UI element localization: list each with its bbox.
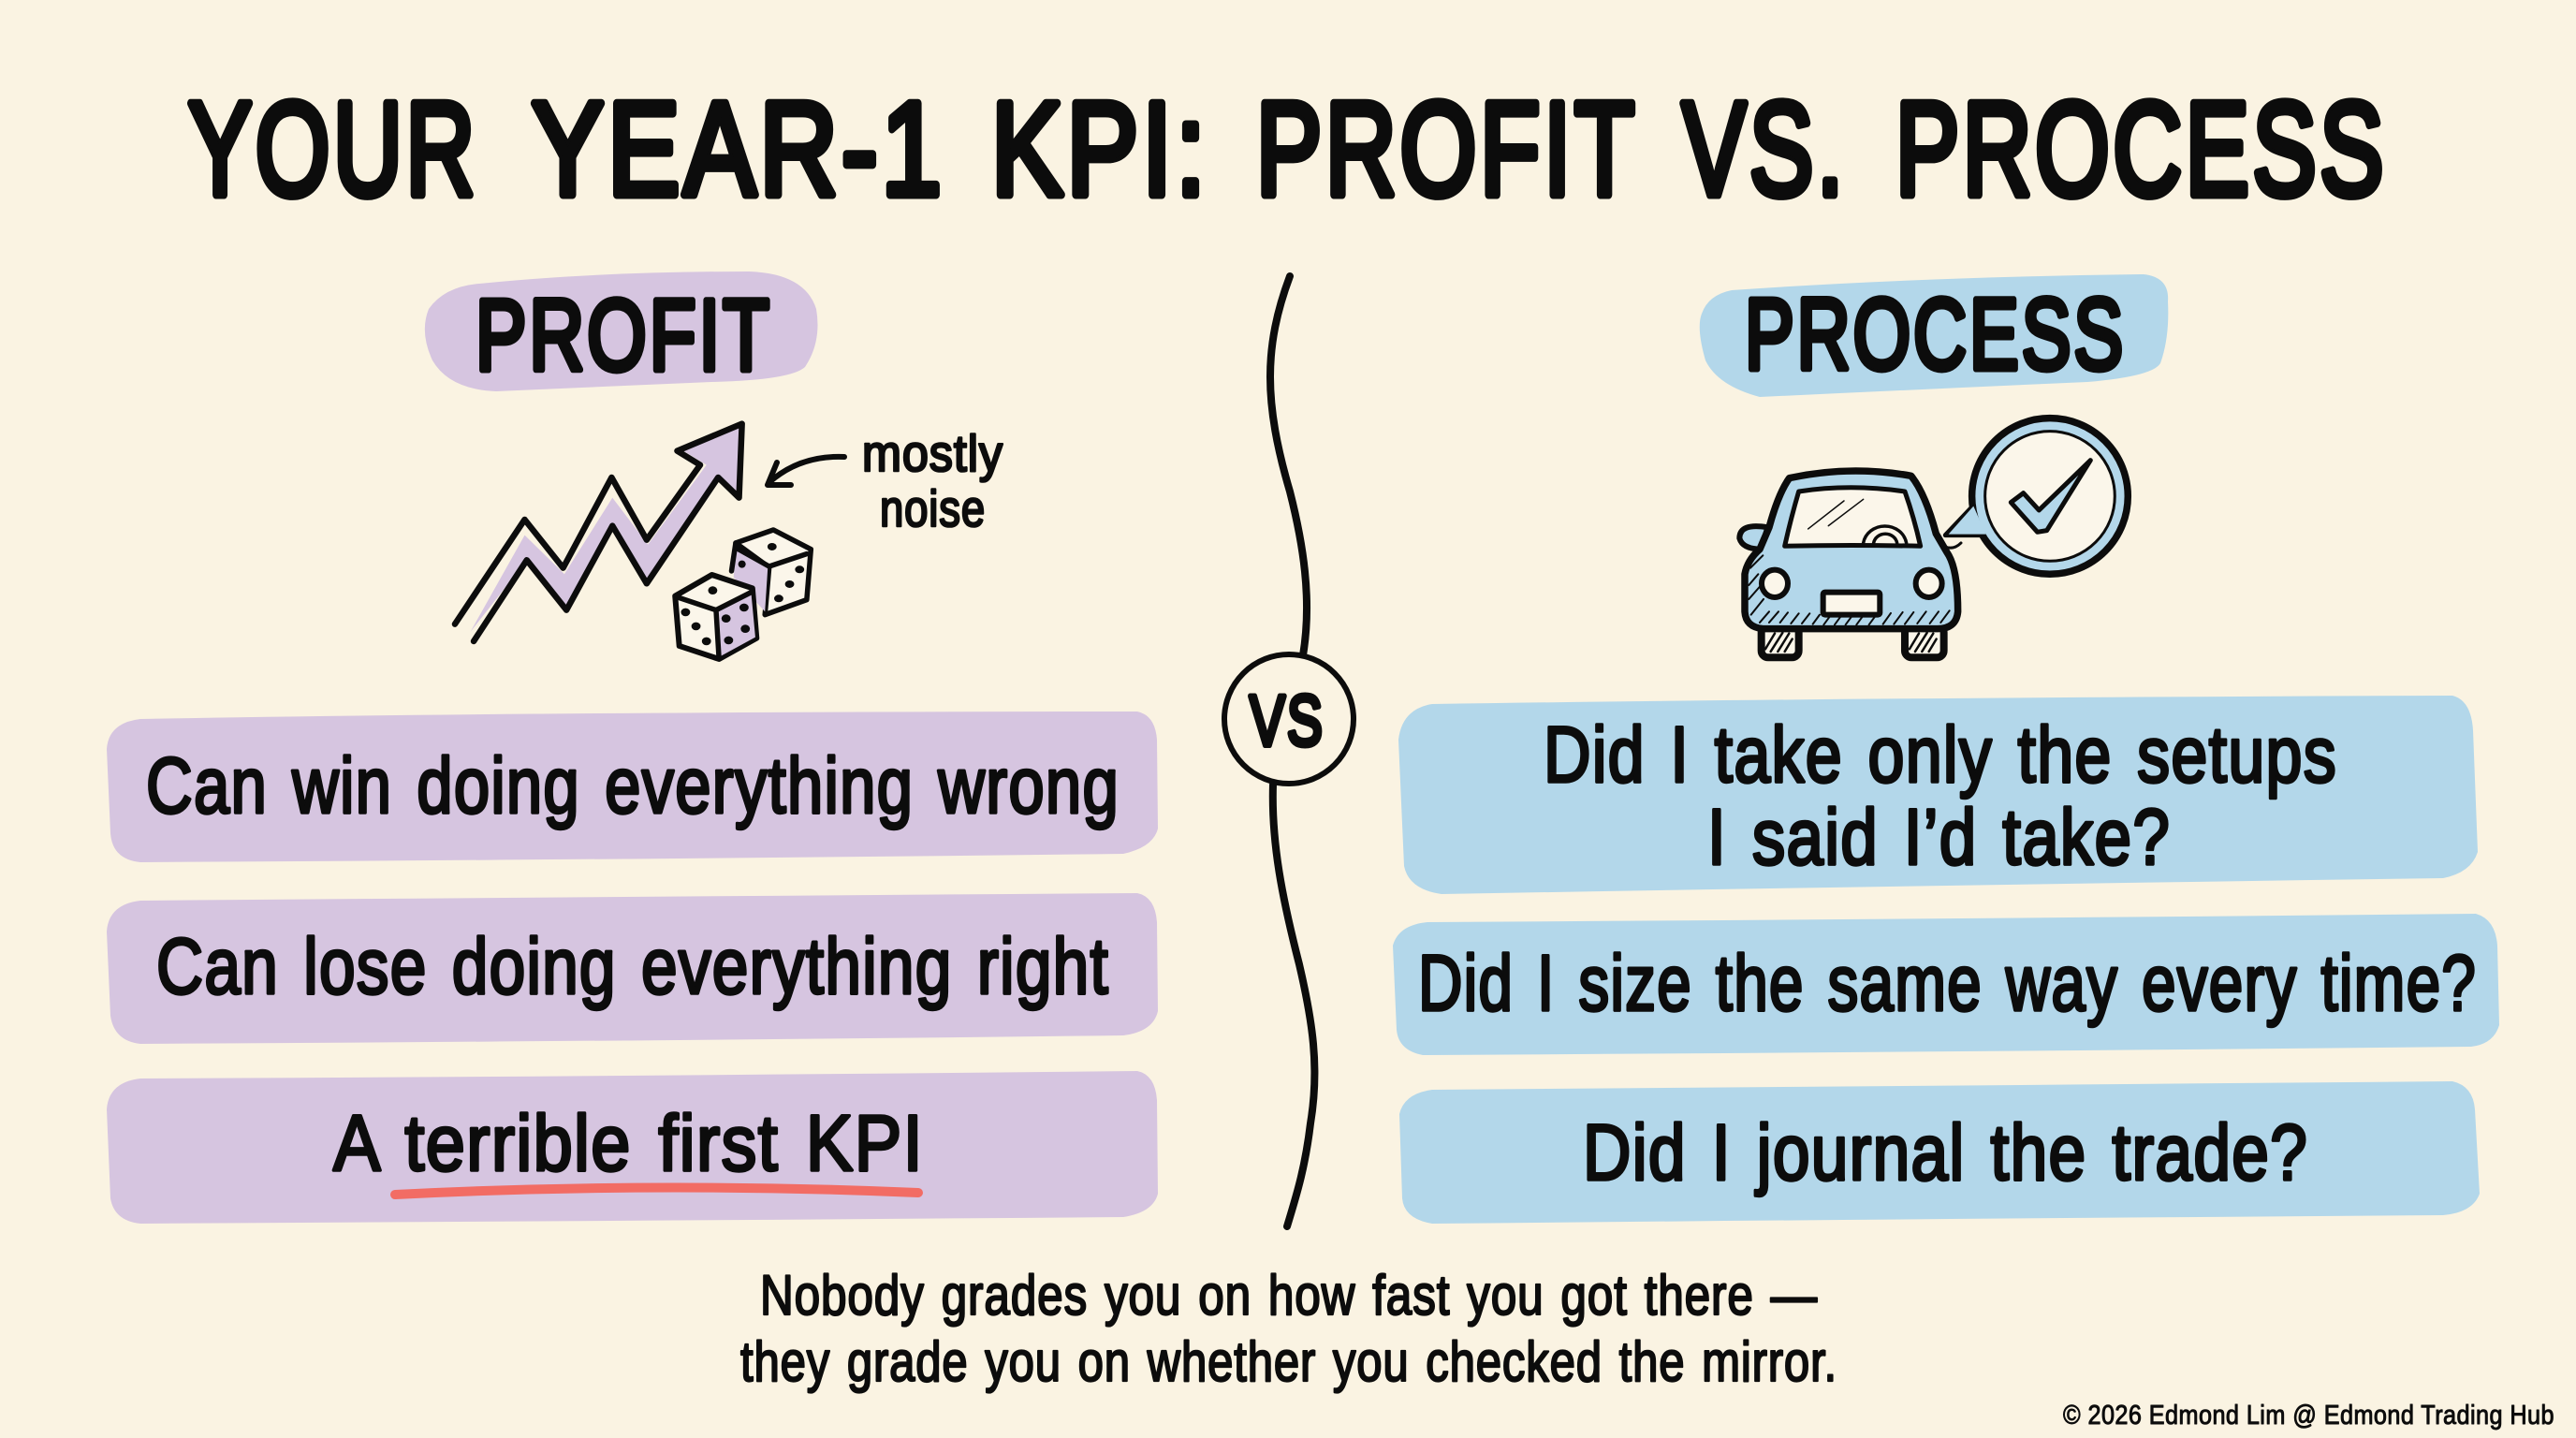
card: did I size the same way every time [1393, 914, 2499, 1055]
title [188, 75, 2387, 224]
badge: VS: VS [1250, 682, 1325, 761]
arrow: pointer to chart [768, 457, 844, 485]
annotation: mostly noise [862, 424, 1003, 537]
card: did I take only the setups: I said I’d take? [1707, 793, 2171, 881]
card: did I take only the setups [1398, 696, 2478, 894]
icon: zigzag arrow chart [455, 424, 742, 641]
card: a terrible first KPI: A terrible first KPI [333, 1099, 924, 1187]
icon: dice [675, 530, 811, 659]
title: YOUR [188, 75, 478, 224]
title: KPI: [991, 75, 1209, 224]
closing statement [740, 1264, 1837, 1393]
panel: process column [1393, 274, 2499, 1224]
card: did I take only the setups: Did I take only the setups [1544, 711, 2337, 799]
title: VS. [1682, 75, 1847, 224]
card: did I journal the trade [1399, 1081, 2480, 1224]
title: YEAR-1 [532, 75, 945, 224]
heading: profit: PROFIT [476, 278, 772, 391]
closing statement: they grade you on whether you checked the mirror. [740, 1330, 1837, 1393]
card: can win doing everything wrong: Can win doing everything wrong [146, 741, 1120, 829]
title: PROFIT [1256, 75, 1638, 224]
card: did I journal the trade: Did I journal the trade? [1583, 1108, 2308, 1196]
card: can win doing everything wrong [107, 712, 1158, 862]
icon: car [1739, 471, 1961, 657]
badge: VS [1224, 654, 1354, 784]
divider: wavy line [1270, 276, 1314, 1226]
card: can lose doing everything right [107, 893, 1158, 1044]
panel: profit column [107, 271, 1158, 1224]
icon: speech bubble with check mark [1945, 418, 2128, 574]
heading: process: PROCESS [1745, 277, 2126, 390]
card: can lose doing everything right: Can lose doing everything right [156, 922, 1109, 1010]
card: a terrible first KPI [107, 1071, 1158, 1224]
title: PROCESS [1895, 75, 2387, 224]
closing statement: Nobody grades you on how fast you got there — [760, 1264, 1818, 1327]
annotation: mostly noise: noise [880, 479, 986, 537]
annotation: mostly noise: mostly [862, 424, 1003, 482]
underline accent [395, 1187, 918, 1195]
